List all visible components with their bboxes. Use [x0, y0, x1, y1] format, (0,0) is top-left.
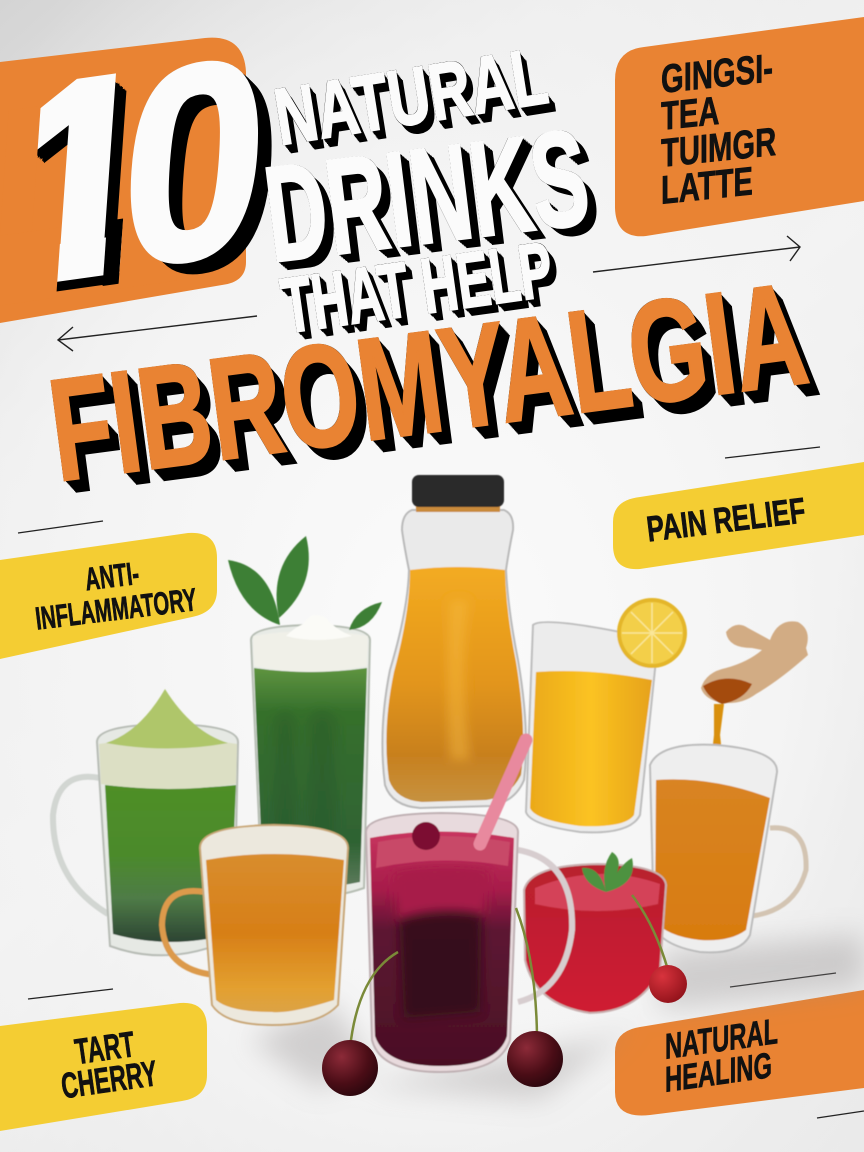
icon: lemon slice — [617, 598, 687, 668]
panel: pain relief — [613, 462, 864, 569]
label: tart cherry: CHERRY — [59, 1052, 160, 1106]
label: pain relief: PAIN RELIEF — [644, 489, 808, 550]
matcha mug — [53, 689, 238, 955]
label: tart cherry: TART — [72, 1023, 137, 1072]
large bottle — [382, 475, 526, 808]
icon: cherries — [322, 895, 687, 1096]
arrow: left — [58, 316, 257, 351]
label: anti-inflammatory: INFLAMMATORY — [33, 581, 199, 637]
label: ginger tea turmeric latte: TUIMGR — [661, 120, 776, 176]
title: natural: NATURAL — [269, 31, 553, 162]
ginger and honey — [701, 621, 808, 770]
panel: tart cherry — [0, 1003, 207, 1131]
label: ginger tea turmeric latte: TEA — [661, 89, 719, 139]
label: tart cherry — [59, 1023, 160, 1106]
title: that help: THAT HELP — [276, 225, 558, 350]
label: ginger tea turmeric latte: GINGSI- — [661, 46, 773, 102]
label: anti-inflammatory — [33, 555, 199, 637]
label: natural healing — [665, 1010, 778, 1100]
red berry drink — [524, 852, 666, 1013]
amber tea mug — [162, 825, 348, 1025]
panel: anti-inflammatory — [0, 533, 217, 659]
label: anti-inflammatory: ANTI- — [83, 555, 141, 597]
panel: natural healing — [615, 990, 864, 1116]
title: fibromyalgia: FIBROMYALGIA — [41, 252, 815, 512]
beet juice glass — [366, 740, 572, 1072]
panel: ginger tea turmeric latte — [615, 17, 864, 236]
label: natural healing: HEALING — [665, 1044, 772, 1100]
title: 10: 10 — [0, 0, 247, 345]
arrow: right — [593, 236, 800, 272]
panel: orange title block — [0, 38, 246, 323]
icon: mint leaves — [228, 536, 382, 630]
green tall glass — [228, 536, 382, 897]
title: drinks: DRINKS — [257, 101, 596, 291]
icon: mint sprig — [582, 852, 633, 892]
yellow juice glass — [526, 598, 687, 832]
tea mug right — [650, 745, 806, 952]
table shadow — [250, 935, 864, 1100]
label: ginger tea turmeric latte — [661, 46, 776, 213]
label: ginger tea turmeric latte: LATTE — [661, 159, 753, 213]
label: natural healing: NATURAL — [665, 1010, 778, 1067]
